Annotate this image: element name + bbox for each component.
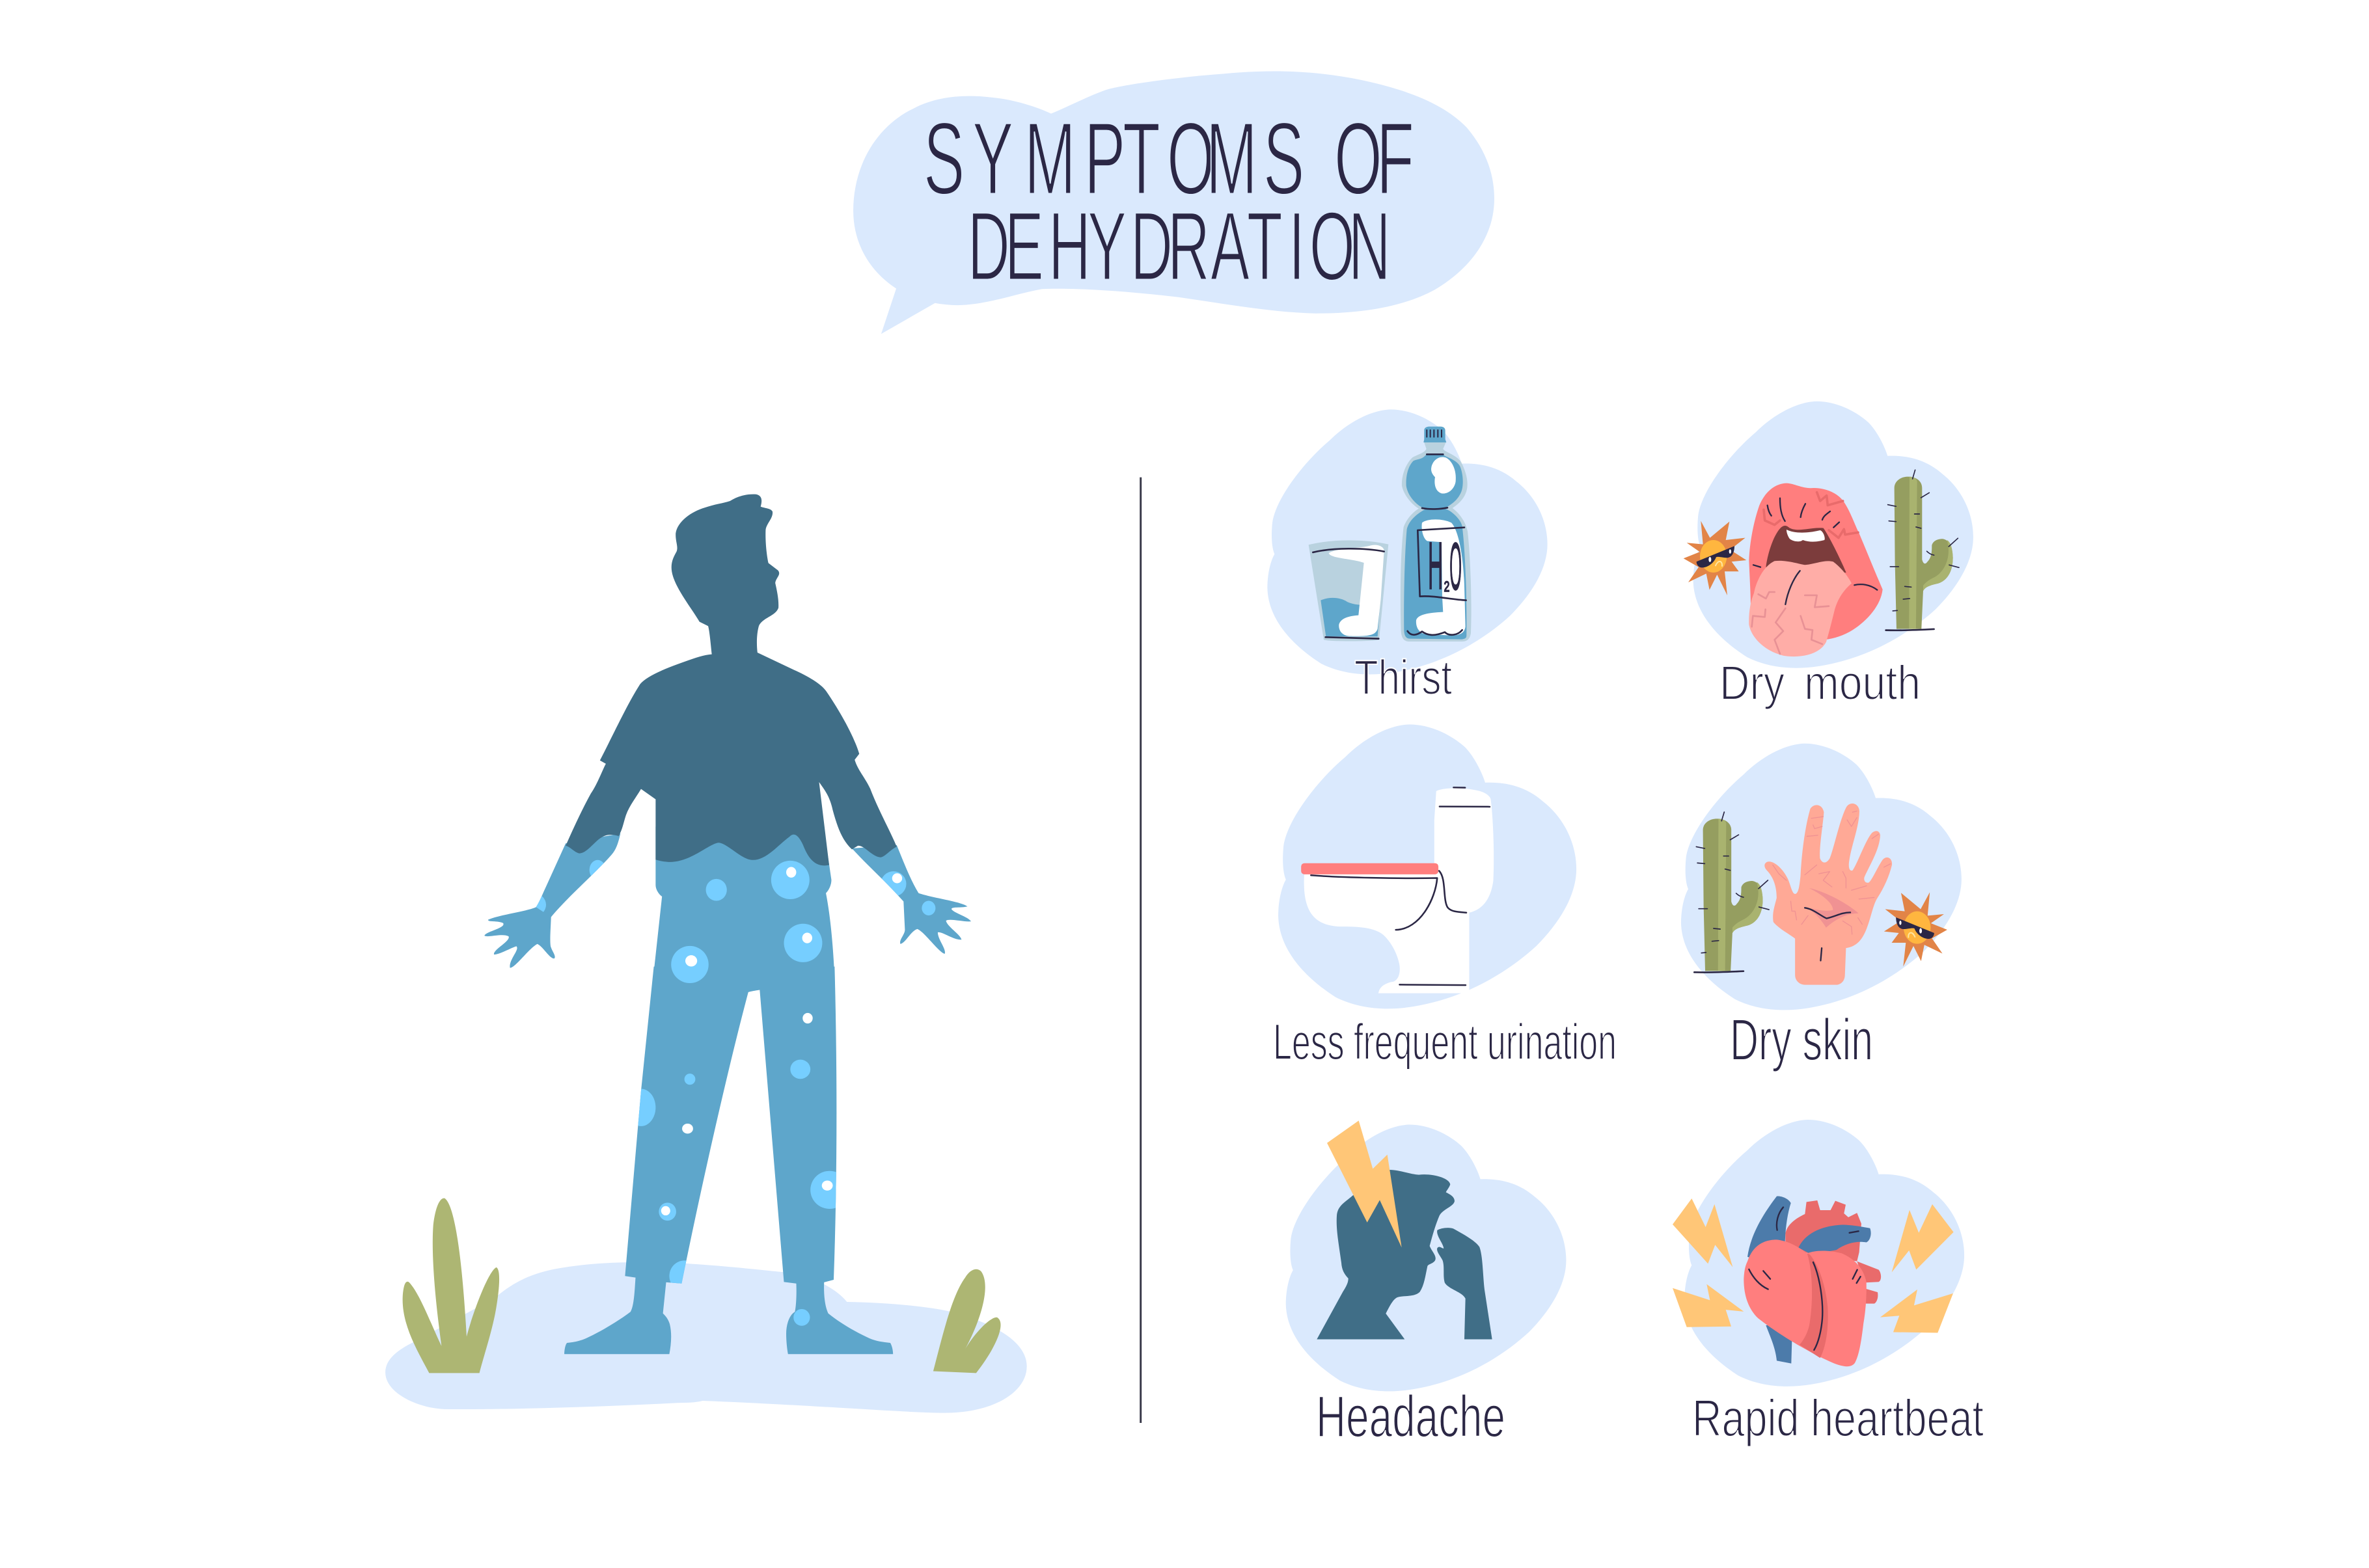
figure upper: water-filled torso and arms xyxy=(484,494,971,989)
icon: sun with sunglasses xyxy=(1884,892,1947,967)
label: thirst: Thirst xyxy=(1354,650,1452,705)
panel: dry mouth xyxy=(1684,401,1973,710)
icon: glass and water bottle: H xyxy=(1428,528,1443,603)
title speech bubble xyxy=(853,71,1494,334)
icon: sun with sunglasses xyxy=(1684,521,1746,595)
divider line xyxy=(1140,478,1142,1423)
panel: thirst: O xyxy=(1449,528,1462,604)
blob: heartbeat xyxy=(1684,1120,1964,1386)
panel: thirst xyxy=(1267,409,1548,705)
label: headache: Headache xyxy=(1316,1385,1505,1450)
title text: DEHYDRATION xyxy=(968,192,1391,301)
icon: toilet xyxy=(1301,787,1494,994)
label: less frequent urination: Less frequent urination xyxy=(1273,1013,1617,1070)
icon: lightning bolts xyxy=(1673,1198,1954,1333)
panel: less frequent urination xyxy=(1273,724,1617,1070)
label: dry mouth: Dry mouth xyxy=(1719,656,1921,710)
icon: glass and water bottle xyxy=(1309,427,1472,642)
icon: cracked hand xyxy=(1764,804,1892,985)
label: rapid heartbeat: Rapid heartbeat xyxy=(1692,1389,1984,1447)
icon: dry lips and cracked tongue xyxy=(1749,483,1883,656)
panel: rapid heartbeat xyxy=(1673,1120,1984,1447)
label: dry skin: Dry skin xyxy=(1730,1008,1873,1073)
dehydrated man figure xyxy=(484,494,971,1354)
icon: anatomical heart xyxy=(1744,1196,1881,1366)
panel: dry skin xyxy=(1681,744,1962,1073)
blob: urination xyxy=(1278,724,1576,1008)
blob: headache xyxy=(1286,1125,1566,1391)
icon: glass and water bottle: 2 xyxy=(1444,578,1449,595)
icon: cactus xyxy=(1886,470,1959,630)
figure lower: legs and feet with bubbles xyxy=(564,967,893,1354)
ground blob under the figure xyxy=(385,1262,1027,1413)
icon: head silhouette with lightning bolt xyxy=(1317,1120,1492,1339)
title text: SYMPTOMS OF xyxy=(924,101,1414,216)
title text xyxy=(924,101,1414,301)
blob: thirst xyxy=(1267,409,1548,675)
panel: headache xyxy=(1286,1120,1566,1450)
plant: left grass xyxy=(403,1198,499,1373)
icon: cactus xyxy=(1694,812,1769,973)
blob: dry skin xyxy=(1681,744,1962,1010)
plant: right grass xyxy=(933,1269,1001,1373)
blob: dry mouth xyxy=(1693,401,1973,668)
